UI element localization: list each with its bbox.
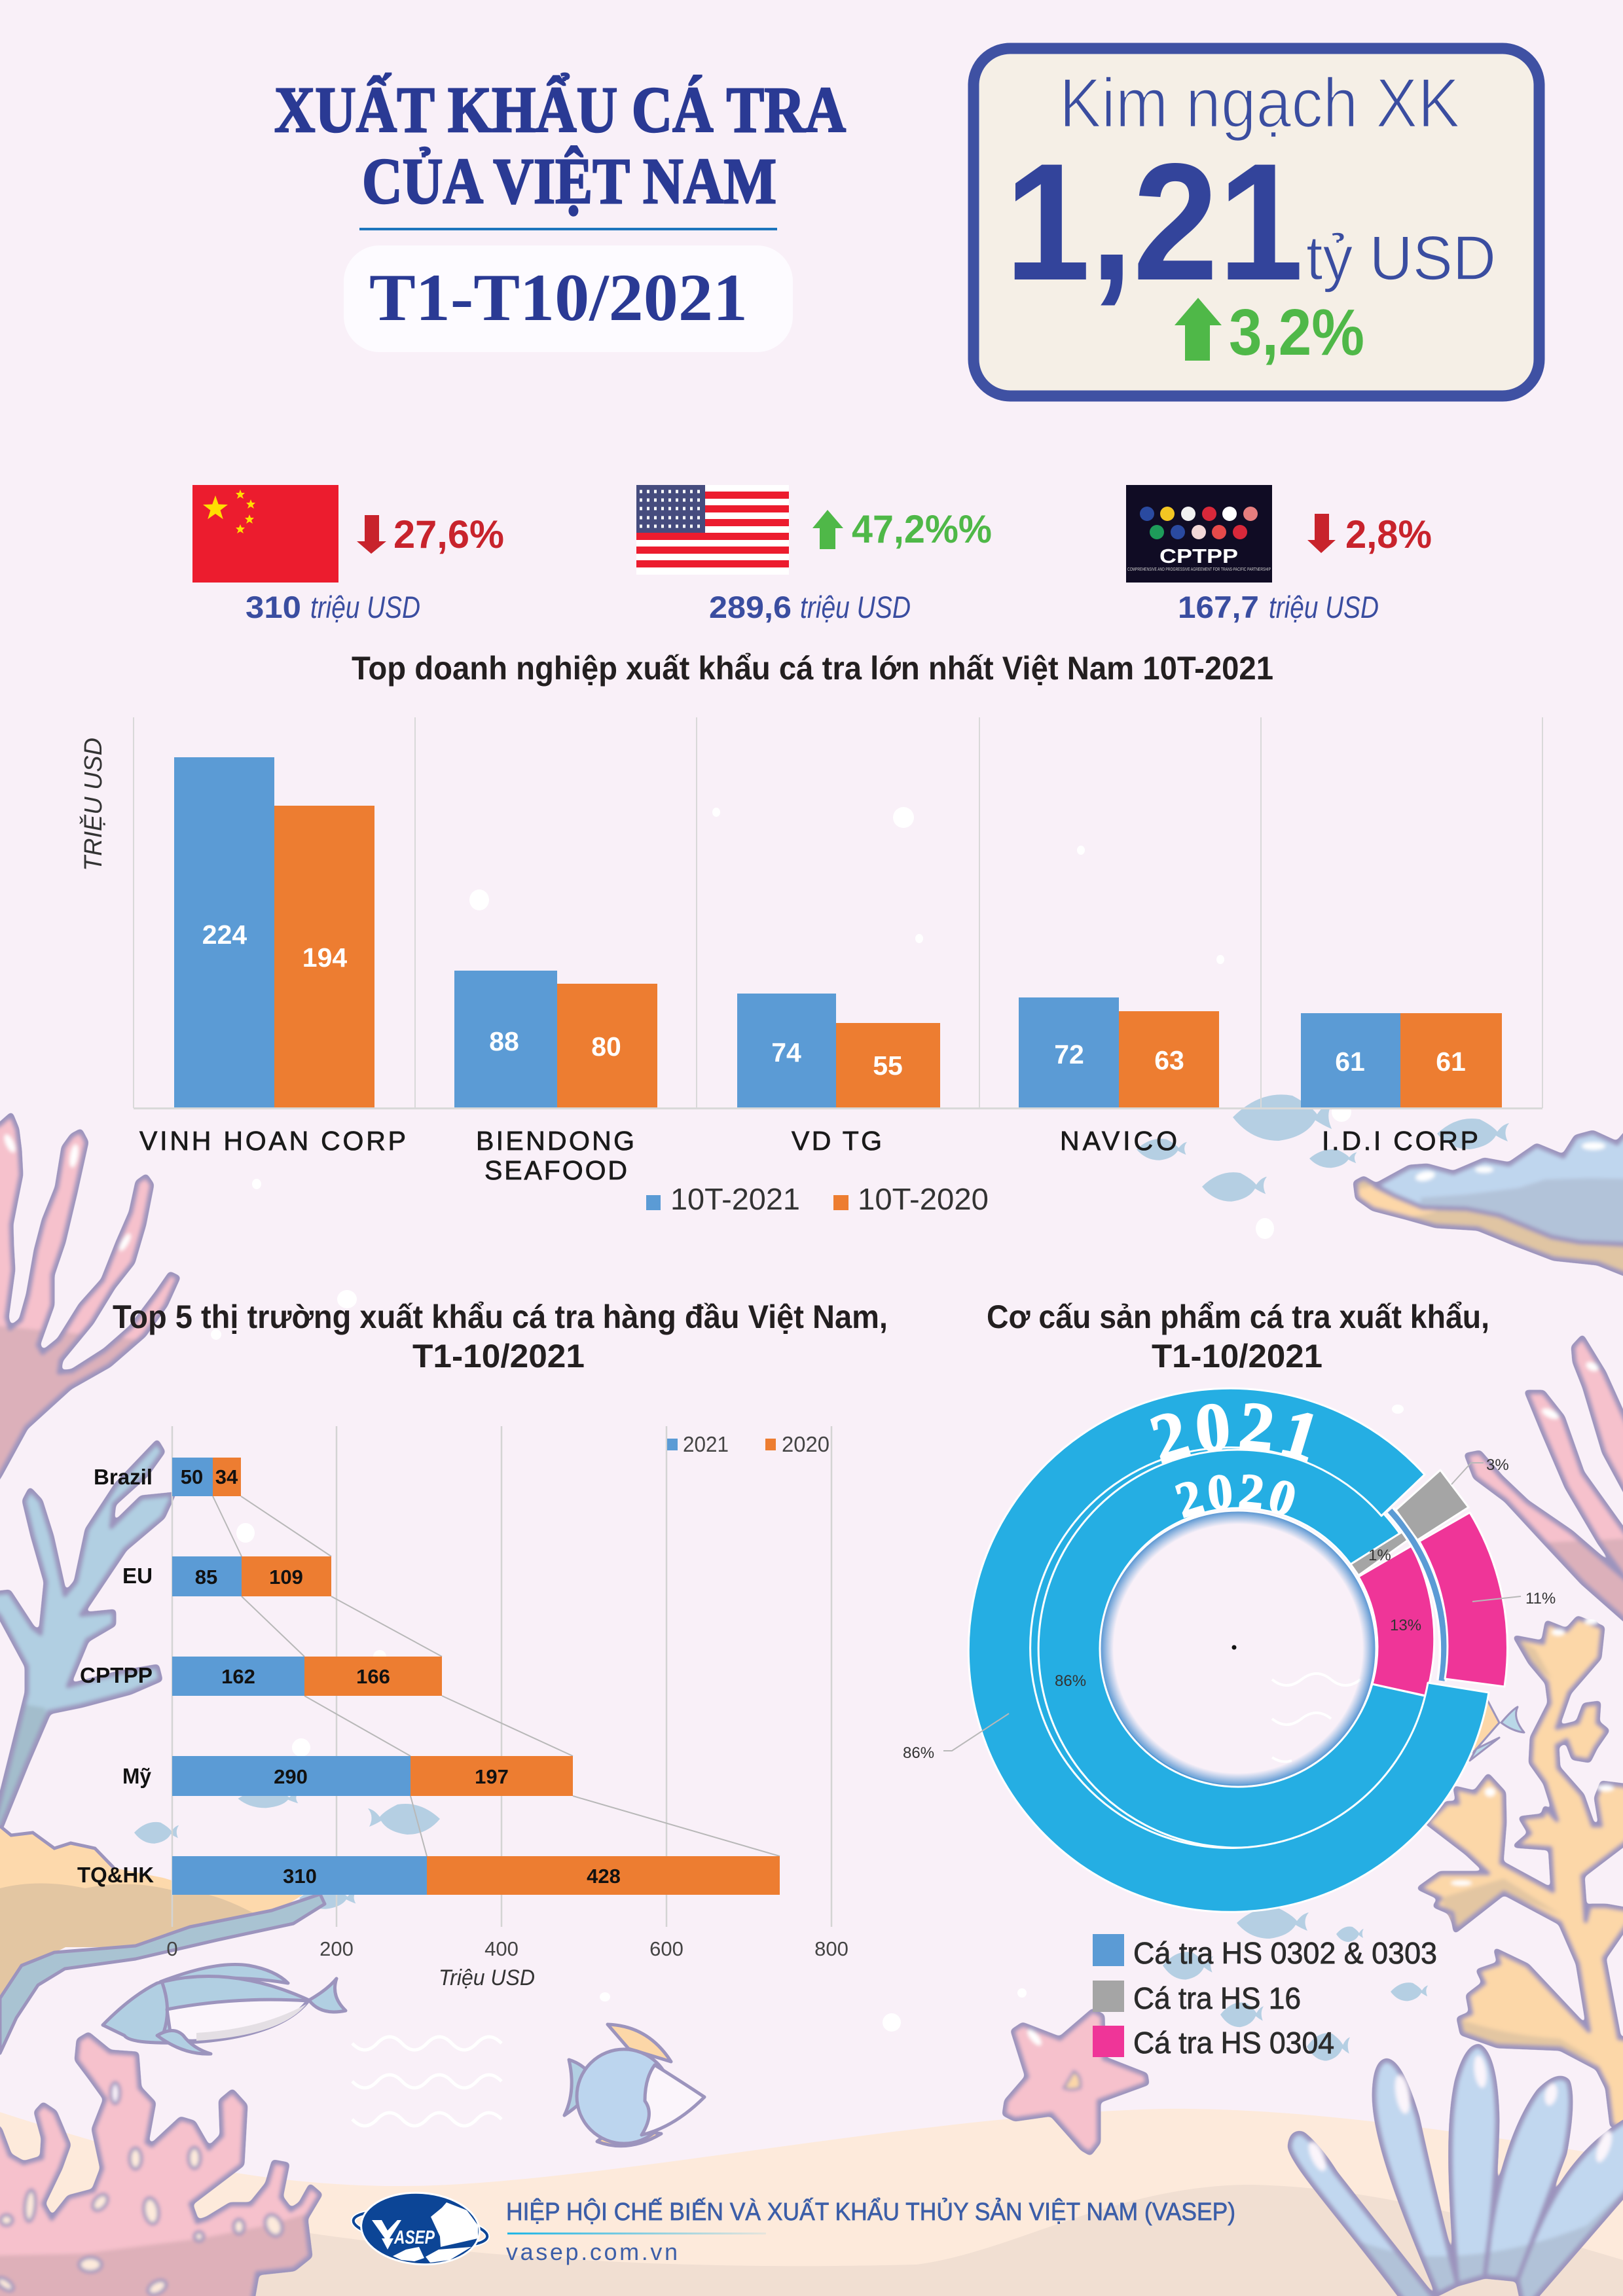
- funnel bar chart: top markets: 34: [215, 1465, 238, 1488]
- heading: top markets: [113, 1299, 888, 1374]
- bar chart: top companies: 61: [1335, 1047, 1365, 1077]
- donut chart: product structure: [903, 1388, 1556, 1912]
- heading: top companies: Top doanh nghiệp xuất khẩu cá tra lớn nhất Việt Nam 10T-2021: [352, 650, 1273, 687]
- bar chart: top companies: SEAFOOD: [484, 1155, 627, 1185]
- donut legend: [1093, 1934, 1437, 2060]
- panel: CPTPP market: 2,8%: [1345, 512, 1432, 556]
- donut legend: Cá tra HS 0304: [1133, 2026, 1334, 2060]
- panel: China market: 27,6%: [393, 512, 504, 556]
- coral: blue leaves lower right: [1290, 2046, 1623, 2296]
- percent labels: 13%: [1390, 1617, 1421, 1634]
- coral: pink upper left: [0, 1113, 180, 1479]
- bar chart: top companies: 224: [202, 920, 247, 950]
- panel: US market: 47,2%%: [852, 507, 992, 551]
- heading: product structure: T1-10/2021: [1152, 1338, 1322, 1374]
- decorative bubbles: [211, 807, 1404, 2032]
- axis ticks: 200: [319, 1937, 354, 1960]
- outer ring 2021: [968, 1388, 1507, 1912]
- bar chart: top companies: 88: [489, 1026, 519, 1056]
- panel: CPTPP market: triệu USD: [1269, 590, 1379, 624]
- funnel bar chart: top markets: TQ&HK: [77, 1863, 154, 1887]
- panel: US market: 289,6: [709, 590, 792, 624]
- coral: blue-grey strip: [0, 1894, 325, 2053]
- seabed sand: [0, 2109, 1623, 2296]
- funnel bar chart: top markets: 109: [269, 1566, 303, 1588]
- funnel bar chart: top markets: 310: [283, 1865, 317, 1888]
- illustration: big blue fish: [103, 1964, 346, 2054]
- donut legend: Cá tra HS 0302 & 0303: [1133, 1936, 1437, 1970]
- panel: total export value: Kim ngạch XK: [1059, 63, 1460, 142]
- chart legend: [646, 1182, 989, 1216]
- bar chart: top companies: 74: [771, 1037, 801, 1067]
- inner ring 2020: [1038, 1450, 1434, 1848]
- flag: CPTPP: CPTPP: [1159, 545, 1238, 567]
- panel: CPTPP market: [1126, 485, 1432, 624]
- year label 2020: 2020: [1175, 1474, 1295, 1518]
- panel: China market: [192, 485, 504, 624]
- chart legend: 10T-2021: [670, 1182, 800, 1216]
- year label 2021: 2021: [1150, 1403, 1313, 1463]
- funnel bar chart: top markets: 197: [475, 1765, 509, 1788]
- funnel bar chart: top markets: 290: [274, 1765, 308, 1788]
- footer organisation name: HIỆP HỘI CHẾ BIẾN VÀ XUẤT KHẨU THỦY SẢN VIỆT NAM (VASEP): [506, 2197, 1235, 2226]
- panel: total export value: tỷ USD: [1306, 223, 1496, 293]
- panel: CPTPP market: 167,7: [1178, 590, 1259, 624]
- chart legend: 2021: [683, 1432, 729, 1456]
- funnel bar chart: top markets: CPTPP: [80, 1663, 153, 1687]
- leader lines: [943, 1463, 1521, 1751]
- coral: pink upper right: [1467, 1337, 1623, 1643]
- logo: VASEP: ASEP: [393, 2227, 435, 2248]
- bar chart: top companies: 194: [302, 942, 347, 973]
- coral: pink lower left: [0, 2034, 327, 2296]
- heading: product structure: [987, 1299, 1489, 1374]
- bar chart: top companies: NAVICO: [1060, 1126, 1177, 1156]
- logo: VASEP: [352, 2188, 489, 2269]
- bar chart: top companies: 80: [591, 1031, 621, 1062]
- funnel bar chart: top markets: Mỹ: [122, 1764, 152, 1788]
- illustration: wave lines in donut hole: [1272, 1674, 1360, 1762]
- percent labels: 1%: [1368, 1547, 1391, 1564]
- panel: total export value: 3,2%: [1229, 296, 1364, 369]
- funnel bar chart: top markets: EU: [122, 1564, 153, 1588]
- percent labels: 3%: [1486, 1456, 1509, 1474]
- percent labels: 86%: [903, 1744, 934, 1762]
- thin separator arc: [1390, 1511, 1444, 1681]
- funnel bar chart: top markets: 428: [587, 1865, 621, 1888]
- panel: China market: 310: [246, 590, 301, 624]
- title: CỦA VIỆT NAM: [362, 145, 776, 217]
- panel: US market: [636, 485, 992, 624]
- percent labels: [903, 1456, 1556, 1762]
- funnel bar chart: top markets: 166: [356, 1665, 390, 1688]
- bar chart: top companies: [79, 717, 1542, 1216]
- flag: USA: [636, 485, 789, 575]
- chart legend: [667, 1432, 830, 1456]
- panel: total export value: 1,21: [1005, 129, 1304, 315]
- coral: blue shell upper right: [1353, 1130, 1623, 1276]
- gap filler between rings: [1036, 1453, 1362, 1843]
- funnel bar chart: top markets: 162: [221, 1665, 255, 1688]
- donut legend: Cá tra HS 16: [1133, 1981, 1301, 2015]
- heading: product structure: Cơ cấu sản phẩm cá tra xuất khẩu,: [987, 1299, 1489, 1335]
- bar chart: top companies: 63: [1154, 1045, 1184, 1075]
- percent labels: 11%: [1525, 1590, 1556, 1607]
- axis ticks: 400: [484, 1937, 519, 1960]
- axis ticks: 800: [814, 1937, 848, 1960]
- heading: top markets: Top 5 thị trường xuất khẩu cá tra hàng đầu Việt Nam,: [113, 1299, 888, 1335]
- period badge: T1-T10/2021: [369, 260, 748, 335]
- donut hole edge: [1100, 1511, 1376, 1787]
- bar chart: top companies: 61: [1436, 1047, 1466, 1077]
- bar chart: top companies: I.D.I CORP: [1322, 1126, 1478, 1156]
- bar chart: top companies: 72: [1054, 1039, 1084, 1069]
- illustration: round fish: [564, 2024, 704, 2146]
- axis title: TRIỆU USD: [79, 738, 107, 871]
- flag: CPTPP: COMPREHENSIVE AND PROGRESSIVE AGREEMENT FOR TRANS-PACIFIC PARTNERSHIP: [1127, 567, 1271, 572]
- footer website: vasep.com.vn: [506, 2238, 678, 2265]
- axis ticks: 0: [166, 1937, 178, 1960]
- illustration: starfish: [1004, 2011, 1147, 2153]
- coral: peach lower left: [0, 1826, 304, 1998]
- chart legend: 2020: [782, 1432, 830, 1456]
- footer rule: [507, 2233, 766, 2234]
- period badge: [344, 245, 793, 352]
- panel: total export value: [974, 48, 1539, 396]
- wave lines left: [352, 2037, 501, 2126]
- funnel bar chart: top markets: 85: [195, 1566, 217, 1588]
- bar chart: top companies: BIENDONG: [476, 1126, 634, 1156]
- axis title: Triệu USD: [439, 1965, 535, 1990]
- coral: blue left: [0, 1440, 175, 1827]
- axis ticks: [166, 1937, 848, 1960]
- coral: peach right: [1419, 1618, 1623, 2134]
- chart legend: 10T-2020: [858, 1182, 989, 1216]
- title: [274, 73, 846, 217]
- bar chart: top companies: VD TG: [792, 1126, 882, 1156]
- flag: CPTPP: [1126, 485, 1272, 583]
- title divider: [359, 228, 777, 230]
- funnel bar chart: top markets: 50: [181, 1465, 203, 1488]
- bar chart: top companies: 55: [873, 1050, 903, 1081]
- flag: China: [192, 485, 338, 583]
- small fish silhouettes: [134, 1094, 1509, 2061]
- percent labels: 86%: [1055, 1672, 1086, 1690]
- funnel bar chart: top markets: [77, 1426, 848, 1990]
- funnel bar chart: top markets: Brazil: [94, 1465, 153, 1489]
- title: XUẤT KHẨU CÁ TRA: [274, 73, 846, 146]
- axis ticks: 600: [649, 1937, 684, 1960]
- panel: US market: triệu USD: [800, 590, 911, 624]
- bar chart: top companies: VINH HOAN CORP: [139, 1126, 406, 1156]
- panel: China market: triệu USD: [310, 590, 420, 624]
- small fish behind donut: [1467, 1698, 1524, 1761]
- heading: top markets: T1-10/2021: [412, 1338, 585, 1374]
